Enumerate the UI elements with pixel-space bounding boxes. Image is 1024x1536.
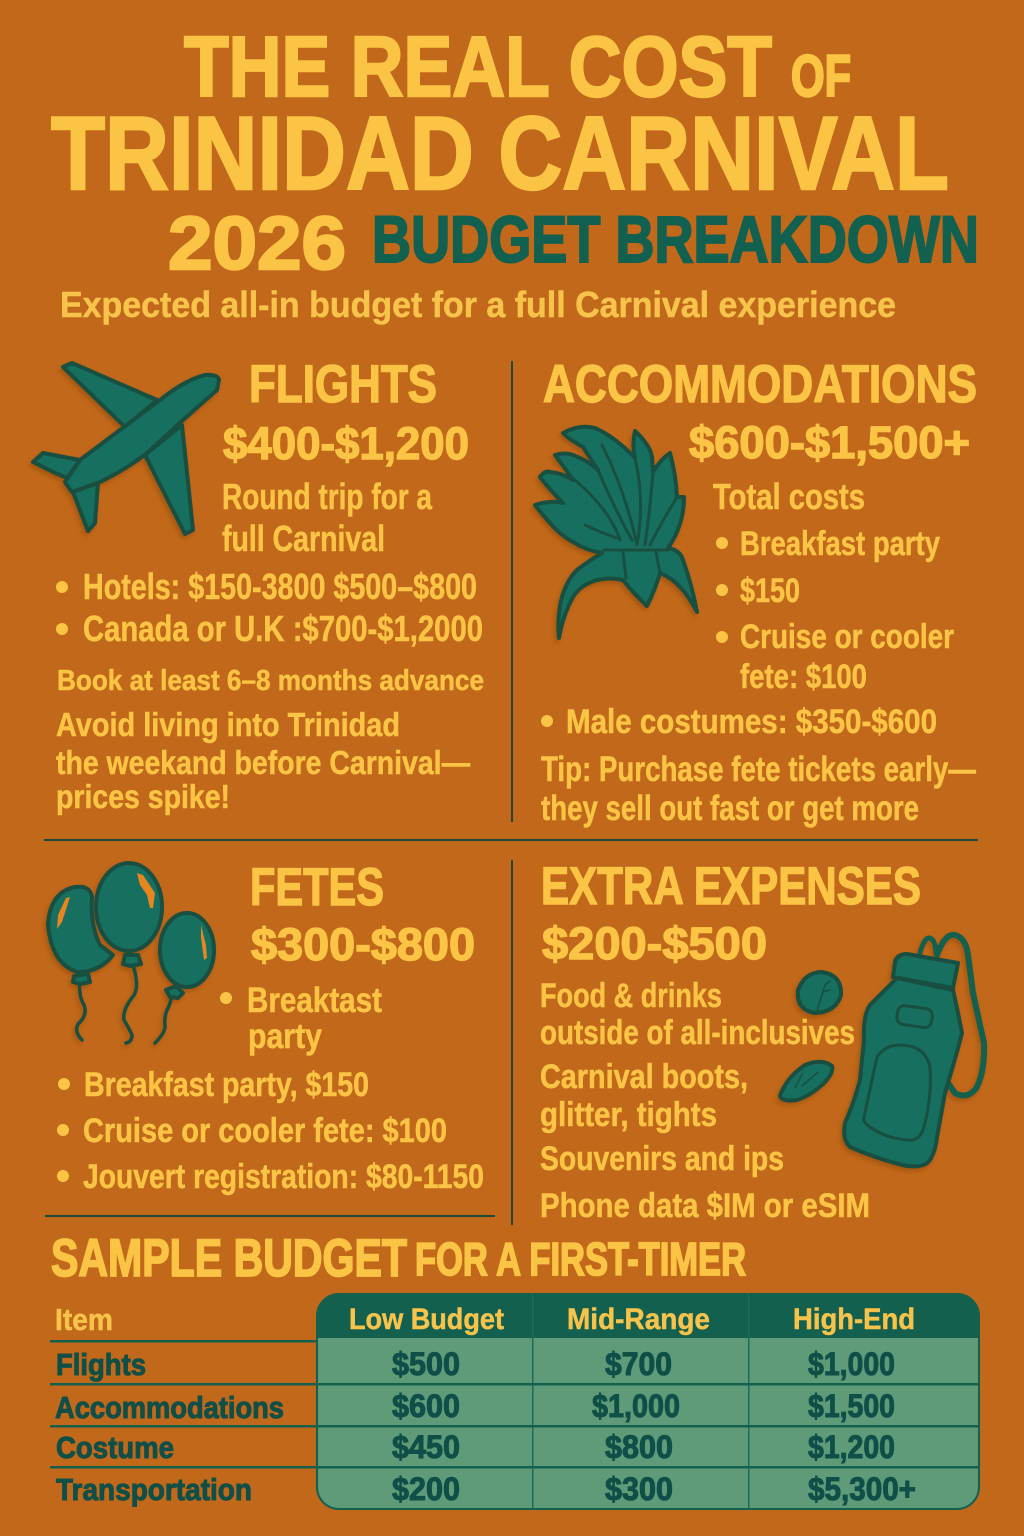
list: fete items: party	[248, 1017, 322, 1056]
row: transportation: $5,300+	[808, 1471, 916, 1507]
text: tip: they sell out fast or get more	[541, 789, 919, 828]
table header: High-End	[793, 1303, 915, 1336]
text: travel warning: Avoid living into Trinidad	[56, 706, 400, 743]
row labels	[55, 1302, 284, 1507]
list: fete items: Jouvert registration: $80-1150	[83, 1158, 484, 1196]
list: extra items: outside of all-inclusives	[540, 1014, 855, 1052]
row labels: Item	[55, 1302, 113, 1337]
panel: flights	[33, 355, 484, 815]
text: tip	[541, 750, 976, 828]
list: flight fares	[56, 566, 483, 649]
row: accommodations: $1,000	[592, 1388, 680, 1424]
icon: carnival headdress	[535, 427, 697, 638]
list: extra items: glitter, tights	[540, 1096, 717, 1134]
icon: balloons	[48, 863, 214, 1043]
text: total costs: Total costs	[713, 476, 865, 517]
list: accommodation items: Male costumes: $350-$600	[566, 703, 937, 741]
list: extra items: Phone data $IM or eSIM	[540, 1187, 870, 1225]
price: extra expenses: $200-$500	[542, 918, 767, 969]
table header: Mid-Range	[567, 1303, 710, 1336]
list: accommodation items: Breakfast party	[740, 525, 940, 563]
list: accommodation items	[541, 525, 954, 741]
row: accommodations	[392, 1388, 895, 1424]
text: travel warning: the weekand before Carnival—	[56, 744, 470, 781]
list: fete items: Breakfast party, $150	[84, 1066, 369, 1104]
row: transportation: $200	[392, 1471, 460, 1507]
panel: fetes	[48, 858, 484, 1196]
heading: sample budget	[51, 1229, 746, 1288]
text: round trip	[222, 476, 433, 559]
title: THE REAL COST	[184, 20, 772, 115]
table header: Low Budget	[349, 1303, 504, 1336]
list: extra items: Food & drinks	[540, 977, 722, 1015]
row: accommodations: $600	[392, 1388, 460, 1424]
table header	[317, 1294, 979, 1338]
text: travel warning: prices spike!	[56, 778, 230, 815]
list: extra items	[540, 977, 870, 1225]
row: flights: $1,000	[808, 1346, 895, 1382]
row: flights: $500	[392, 1346, 460, 1382]
heading: flights: FLIGHTS	[249, 355, 437, 414]
price: fetes: $300-$800	[251, 919, 475, 970]
list: fete items: Cruise or cooler fete: $100	[83, 1112, 447, 1150]
icon: leaf top	[798, 972, 841, 1013]
title	[51, 20, 979, 285]
title: 2026	[168, 201, 346, 285]
list: extra items: Souvenirs and ips	[540, 1140, 784, 1178]
text: round trip: full Carnival	[222, 518, 385, 559]
row labels: Flights	[56, 1347, 146, 1382]
row labels: Accommodations	[55, 1390, 284, 1425]
row: transportation: $300	[605, 1471, 673, 1507]
list: accommodation items: $150	[740, 572, 800, 610]
row: flights: $700	[605, 1346, 672, 1382]
table: sample budget	[50, 1294, 979, 1509]
list: fete items: Breaktast	[247, 981, 382, 1020]
list: flight fares: Hotels: $150-3800 $500–$800	[83, 566, 477, 607]
list: fete items	[57, 981, 484, 1196]
price: flights: $400-$1,200	[223, 418, 469, 469]
row: costume: $800	[605, 1429, 673, 1465]
row: costume: $450	[392, 1429, 460, 1465]
row: costume	[392, 1429, 895, 1465]
icon: airplane	[33, 363, 219, 534]
list: accommodation items: fete: $100	[740, 658, 867, 696]
panel: accommodations	[535, 355, 977, 828]
icon: water bottle	[844, 935, 984, 1166]
heading: fetes: FETES	[250, 858, 384, 917]
table body background	[317, 1294, 979, 1509]
row: transportation	[392, 1471, 916, 1507]
list: extra items: Carnival boots,	[540, 1058, 748, 1096]
price: accommodations: $600-$1,500+	[689, 417, 970, 468]
panel: extra expenses	[540, 857, 984, 1225]
heading: sample budget: FOR A FIRST-TIMER	[415, 1233, 746, 1285]
title: OF	[791, 44, 851, 109]
subtitle: Expected all-in budget for a full Carnival experience	[60, 284, 896, 325]
text: round trip: Round trip for a	[222, 476, 433, 517]
list: accommodation items: Cruise or cooler	[740, 618, 954, 656]
row: costume: $1,200	[808, 1429, 895, 1465]
heading: sample budget: SAMPLE BUDGET	[51, 1229, 407, 1288]
row: accommodations: $1,500	[808, 1388, 895, 1424]
heading: extra expenses: EXTRA EXPENSES	[541, 857, 921, 916]
text: booking advice: Book at least 6–8 months advance	[57, 665, 484, 697]
list: flight fares: Canada or U.K :$700-$1,2000	[83, 608, 483, 649]
row labels: Costume	[56, 1430, 174, 1465]
row labels: Transportation	[56, 1472, 252, 1507]
text: travel warning	[56, 706, 470, 815]
icon: leaf bottom	[780, 1062, 832, 1100]
row: flights	[392, 1346, 895, 1382]
